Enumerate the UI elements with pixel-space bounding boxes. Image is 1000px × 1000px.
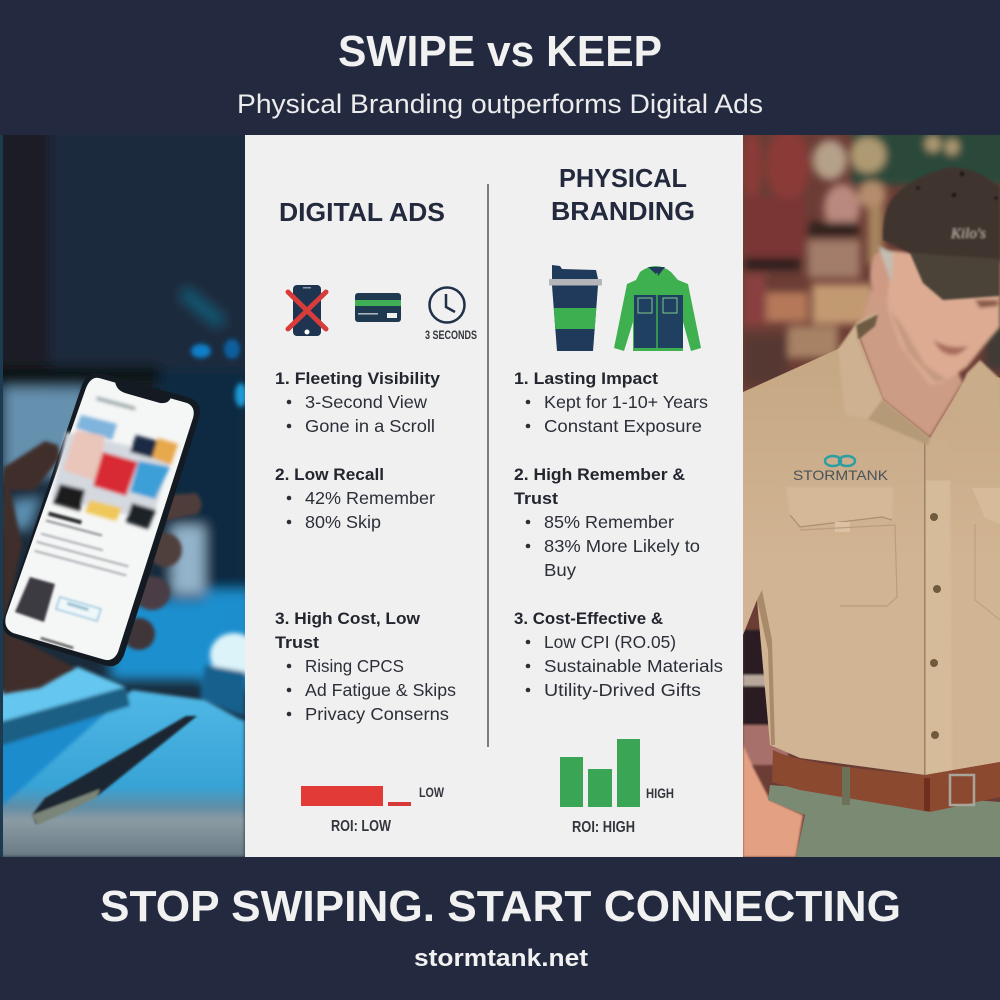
column: digital ads xyxy=(275,197,477,835)
heading: physical branding xyxy=(551,163,695,226)
chart: high ROI xyxy=(560,739,674,836)
list: low recall: 2. Low Recall xyxy=(275,465,384,484)
list: high cost, low trust: Privacy Conserns xyxy=(305,704,449,724)
list: high cost, low trust xyxy=(275,609,456,724)
comparison panel xyxy=(245,135,743,857)
website: stormtank.net xyxy=(414,945,588,972)
cap: Kilo's xyxy=(950,226,986,242)
heading: physical branding: BRANDING xyxy=(551,196,695,226)
list: low recall: 80% Skip xyxy=(305,512,381,532)
list: fleeting visibility: Gone in a Scroll xyxy=(305,416,435,436)
hand xyxy=(3,441,202,694)
shirt logo: STORMTANK xyxy=(793,467,889,483)
list: lasting impact: Constant Exposure xyxy=(544,416,702,436)
list: high remember and trust: Trust xyxy=(514,489,558,508)
list: low recall xyxy=(275,465,435,532)
neck and face xyxy=(858,246,1000,438)
call to action: STOP SWIPING. START CONNECTING xyxy=(100,882,901,931)
list: high cost, low trust: 3. High Cost, Low xyxy=(275,609,421,628)
collar xyxy=(838,312,998,445)
heading: digital ads: DIGITAL ADS xyxy=(279,197,445,227)
list: high remember and trust: 83% More Likely to xyxy=(544,536,700,556)
list: lasting impact: 1. Lasting Impact xyxy=(514,369,658,388)
heading: physical branding: PHYSICAL xyxy=(559,163,687,193)
subtitle: Physical Branding outperforms Digital Ads xyxy=(237,89,763,119)
list: high remember and trust: Buy xyxy=(544,560,576,580)
shirt xyxy=(743,335,1000,775)
list: fleeting visibility: 1. Fleeting Visibility xyxy=(275,369,441,388)
list: cost-effective xyxy=(514,609,723,700)
chart: high ROI: ROI: HIGH xyxy=(572,819,635,836)
cap xyxy=(883,167,1000,300)
list: high cost, low trust: Ad Fatigue & Skips xyxy=(305,680,456,700)
icon: clock, 3 seconds xyxy=(425,288,477,342)
title: SWIPE vs KEEP xyxy=(338,27,662,76)
desk and paper xyxy=(0,667,245,857)
list: fleeting visibility xyxy=(275,369,441,436)
list: lasting impact: Kept for 1-10+ Years xyxy=(544,392,708,412)
icon: reusable cup xyxy=(549,265,602,351)
footer xyxy=(100,882,901,972)
list: high cost, low trust: Rising CPCS xyxy=(305,656,404,676)
list: high cost, low trust: Trust xyxy=(275,633,319,652)
list: high remember and trust: 2. High Remember & xyxy=(514,465,685,484)
icon: credit card xyxy=(355,293,401,322)
phone xyxy=(3,372,200,666)
list: cost-effective: Sustainable Materials xyxy=(544,656,723,676)
list: low recall: 42% Remember xyxy=(305,488,435,508)
pen xyxy=(32,716,197,825)
chart: high ROI: HIGH xyxy=(646,785,674,801)
shirt logo xyxy=(793,456,889,483)
list: lasting impact xyxy=(514,369,708,436)
chart: low ROI: ROI: LOW xyxy=(331,818,392,835)
photo: man in branded shirt xyxy=(742,125,1000,857)
list: cost-effective: Utility-Drived Gifts xyxy=(544,680,701,700)
chart: low ROI: LOW xyxy=(419,784,445,800)
chart: low ROI xyxy=(301,784,445,835)
list: high remember and trust: 85% Remember xyxy=(544,512,674,532)
belt and trousers xyxy=(768,750,1000,857)
photo: hand holding phone xyxy=(0,120,260,857)
list: cost-effective: 3. Cost-Effective & xyxy=(514,609,663,628)
lower background and hand xyxy=(743,630,803,857)
list: fleeting visibility: 3-Second View xyxy=(305,392,427,412)
list: high remember and trust xyxy=(514,465,700,580)
list: cost-effective: Low CPI (RO.05) xyxy=(544,632,676,652)
icon: branded jacket xyxy=(614,266,701,351)
icon: crossed-out phone xyxy=(288,285,326,336)
icon: clock, 3 seconds: 3 SECONDS xyxy=(425,328,477,342)
column: physical branding xyxy=(514,163,723,836)
header xyxy=(237,27,763,119)
